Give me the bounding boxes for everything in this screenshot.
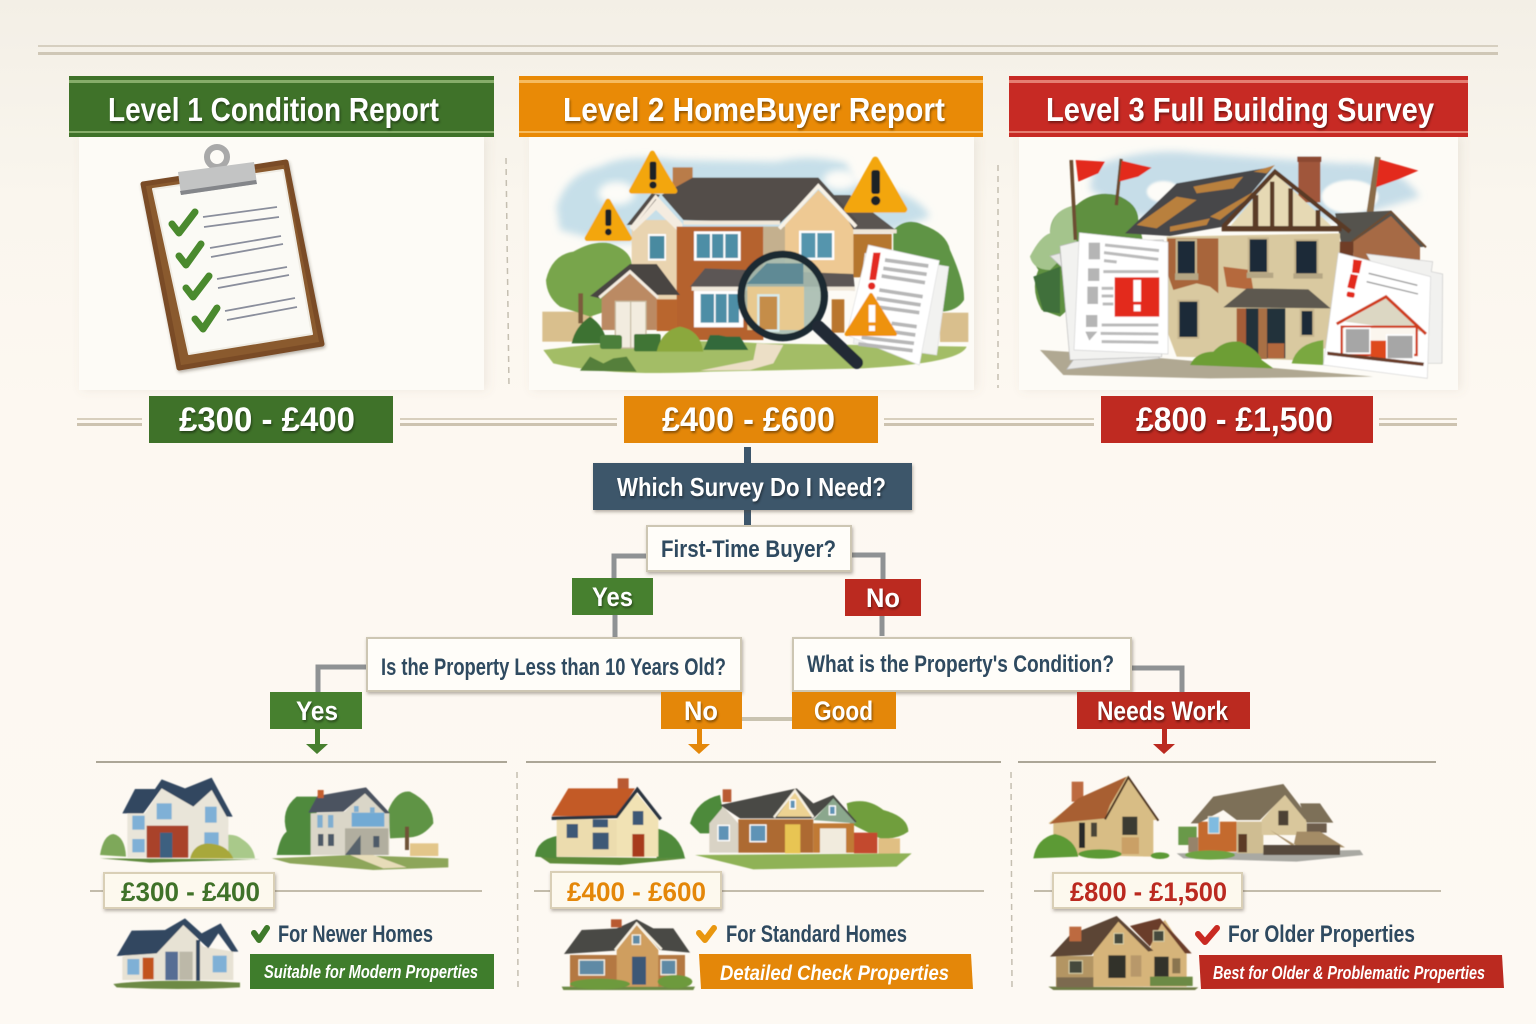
price badge: level 2: £400 - £600 (662, 401, 835, 439)
bottom section rules (90, 762, 1441, 891)
price badge: level 3 (1101, 396, 1373, 443)
house illustrations: standard homes (535, 778, 912, 869)
price tag: £300 - £400 (121, 877, 260, 907)
icon: house (562, 919, 695, 990)
illustration: inspected house with warnings (542, 153, 968, 373)
banner: detailed check properties (699, 954, 973, 989)
question: property condition: What is the Property's Condition? (807, 651, 1114, 678)
answer: no, older (661, 692, 742, 754)
question: first-time buyer (647, 526, 851, 571)
answer: no (845, 579, 921, 616)
result column: older properties (1033, 776, 1504, 990)
result column: newer homes (100, 778, 494, 989)
text: for older properties: For Older Properties (1228, 921, 1415, 948)
heading: level 1: Level 1 Condition Report (108, 91, 439, 128)
panel: level 1 condition report (69, 76, 494, 390)
question: property age: Is the Property Less than 10 Years Old? (381, 654, 726, 681)
price badge: level 3: £800 - £1,500 (1136, 401, 1333, 439)
question: property age (367, 638, 741, 691)
icon: house (113, 918, 240, 989)
price badge: level 1: £300 - £400 (179, 401, 355, 439)
answer: good (792, 692, 896, 729)
answer: needs work: Needs Work (1097, 696, 1229, 726)
heading: level 3 (1009, 76, 1468, 137)
price row rules (77, 418, 1457, 426)
start node: Which Survey Do I Need? (617, 472, 886, 502)
text: for standard homes: For Standard Homes (726, 921, 907, 948)
heading: level 2: Level 2 HomeBuyer Report (563, 91, 945, 128)
flowchart: which survey decision tree (270, 447, 1250, 754)
question: first-time buyer: First-Time Buyer? (661, 536, 836, 563)
price badge: level 2 (624, 396, 878, 443)
heading: level 2 (519, 76, 983, 137)
magnifying glass (741, 254, 857, 363)
price tag: £400 - £600 (567, 877, 706, 907)
text: for newer homes: For Newer Homes (278, 921, 433, 948)
panel: level 3 full building survey (1009, 76, 1468, 390)
icon: check (699, 928, 714, 940)
answer: good: Good (814, 696, 873, 726)
answer: yes, newer (270, 692, 362, 754)
answer: no: No (866, 583, 900, 613)
banner: best for older and problematic properties (1199, 955, 1504, 989)
answer: needs work (1077, 692, 1250, 754)
price badge: level 1 (149, 396, 393, 443)
heading: level 3: Level 3 Full Building Survey (1046, 91, 1435, 128)
icon: clipboard checklist (143, 147, 322, 368)
price tag: £800 - £1,500 (1070, 877, 1227, 907)
dashed dividers top (506, 158, 998, 388)
heading: level 1 (69, 76, 494, 137)
result column: standard homes (535, 778, 973, 990)
house illustrations: modern homes (100, 778, 448, 870)
question: property condition (793, 638, 1131, 691)
answer: yes (572, 578, 653, 615)
answer: yes: Yes (592, 582, 633, 612)
answer: yes, newer: Yes (296, 696, 338, 726)
icon: check (1198, 928, 1217, 942)
icon: check (254, 928, 267, 940)
banner: suitable for modern properties (250, 954, 494, 989)
panel: level 2 homebuyer report (519, 76, 983, 390)
icon: house (1048, 916, 1198, 990)
start node (593, 463, 912, 510)
banner: suitable for modern properties: Suitable for Modern Properties (264, 962, 478, 982)
illustration: old house with red flags (1030, 152, 1443, 378)
banner: detailed check properties: Detailed Check Properties (720, 962, 949, 985)
answer: no, older: No (684, 696, 718, 726)
house illustrations: older homes (1033, 776, 1363, 862)
warning triangles (587, 153, 904, 238)
dashed dividers bottom (517, 772, 1012, 988)
